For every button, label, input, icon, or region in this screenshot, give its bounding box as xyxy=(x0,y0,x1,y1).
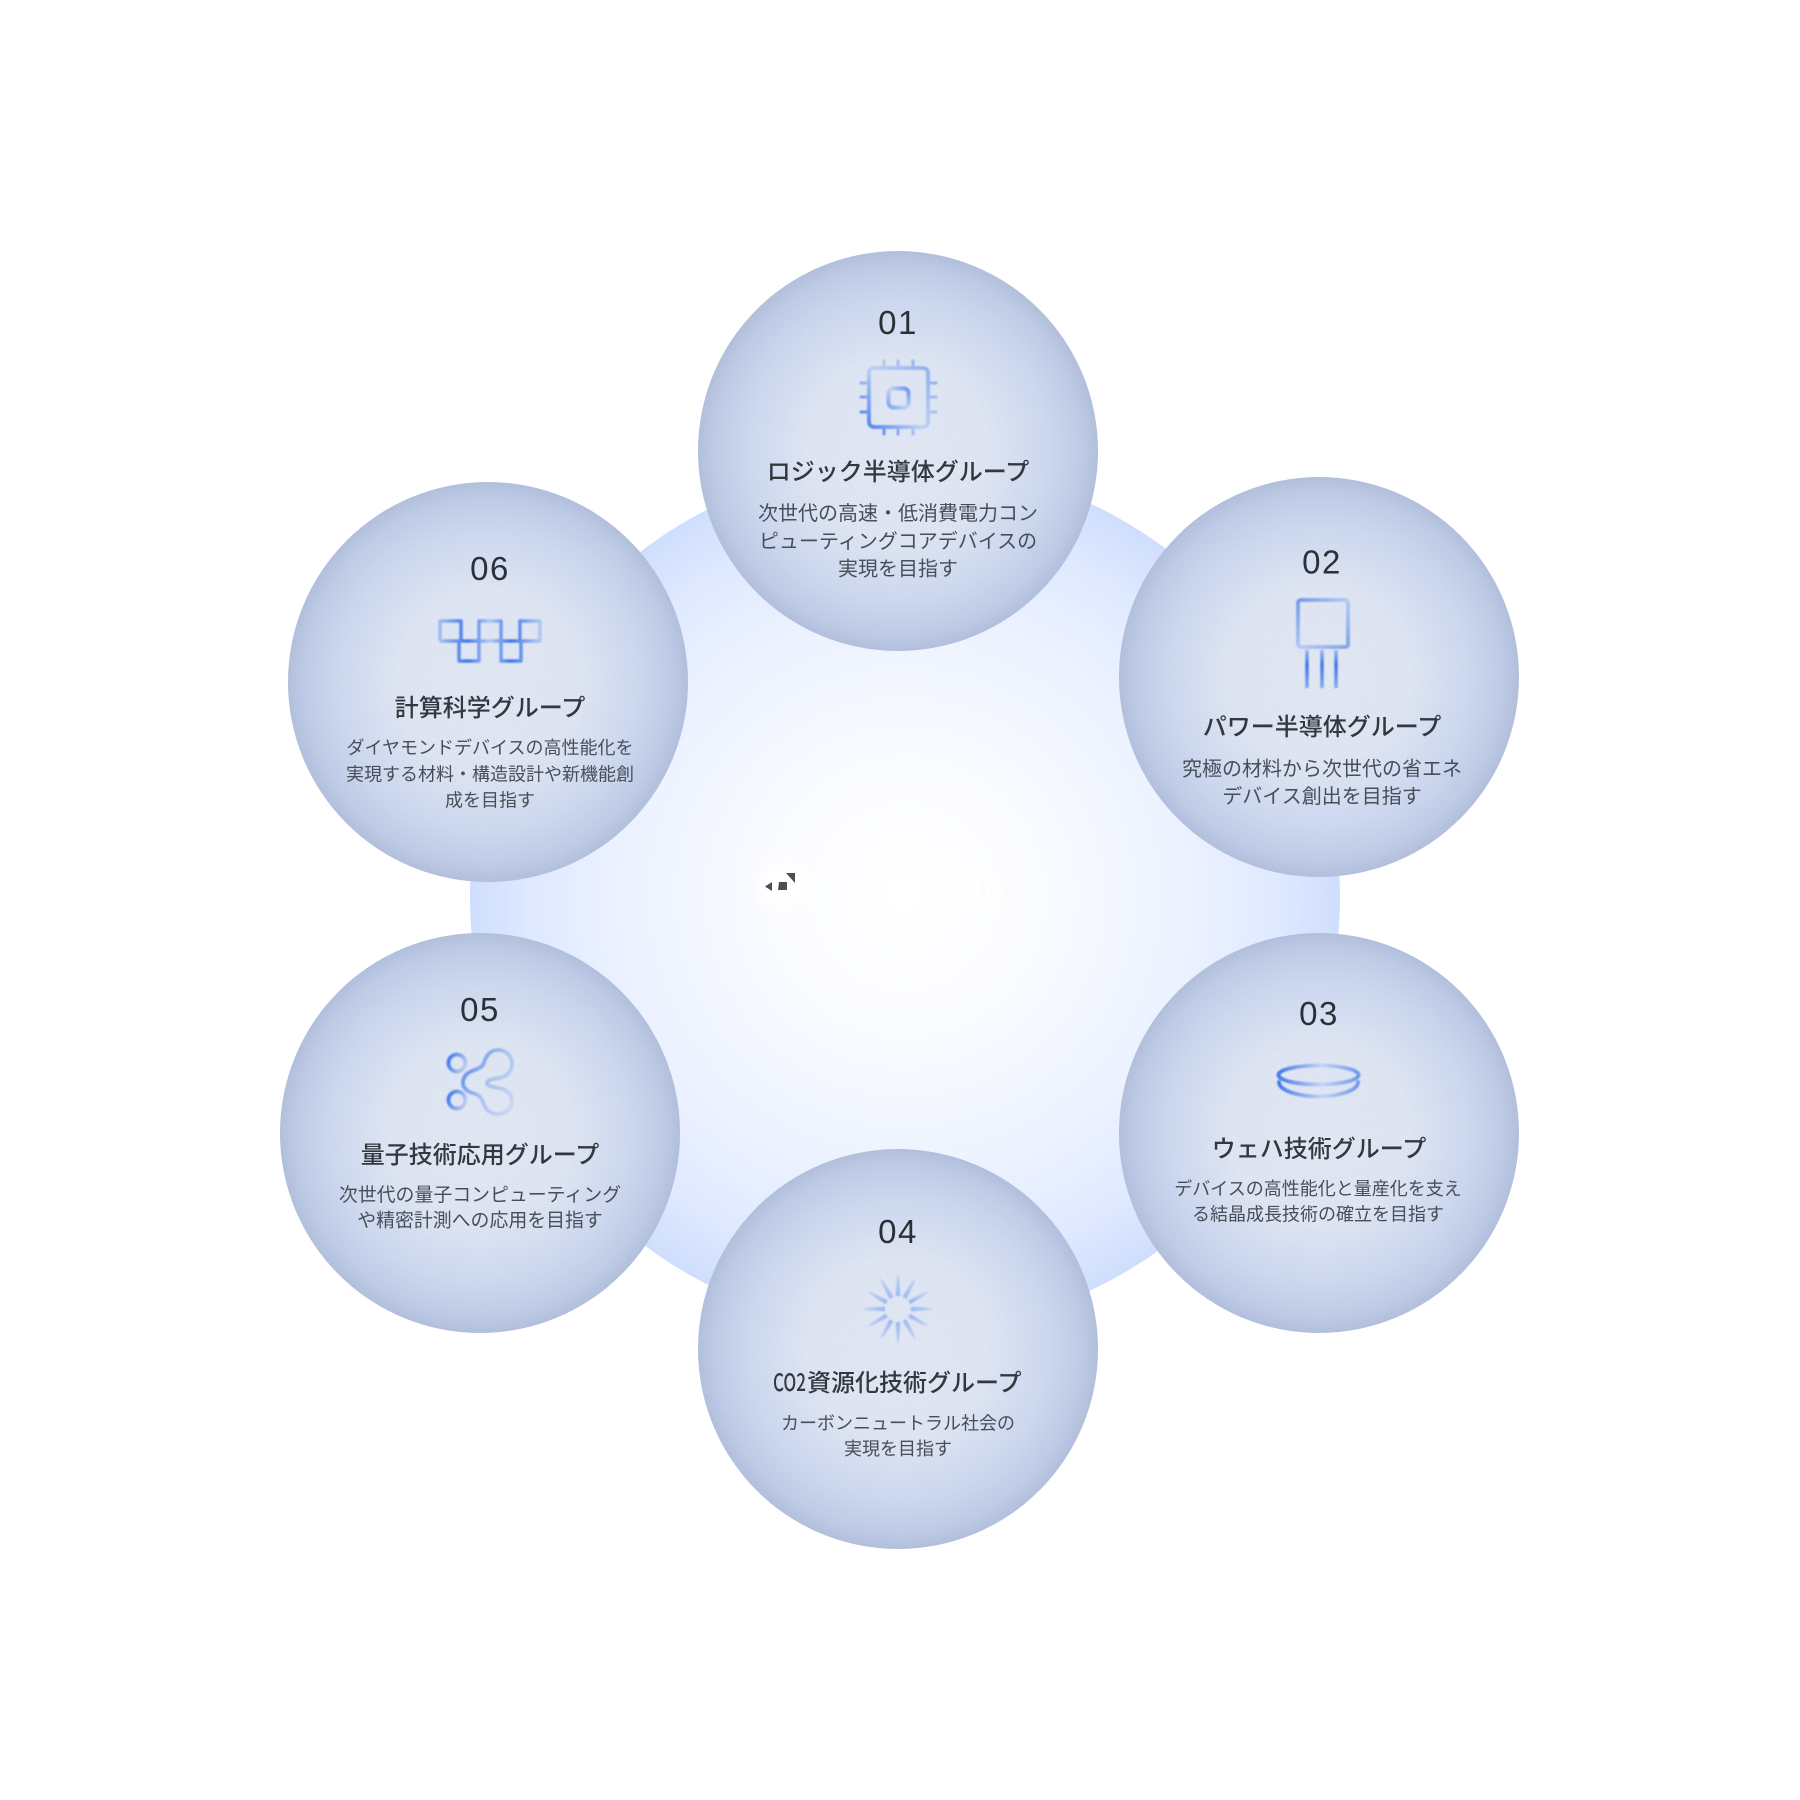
number 03: 03 xyxy=(1299,995,1339,1032)
panel 05: quantum technology xyxy=(280,933,680,1333)
icon: quantum network xyxy=(448,1050,512,1114)
number 05: 05 xyxy=(460,991,500,1028)
description xyxy=(346,734,634,812)
description: デバイス創出を目指す xyxy=(1222,780,1422,809)
icon: power transistor xyxy=(1298,600,1348,688)
heading: パワー半導体グループ xyxy=(1203,707,1441,742)
number 01: 01 xyxy=(878,304,918,341)
central gradient circle xyxy=(470,462,1340,1332)
description: 成を目指す xyxy=(445,786,535,812)
number 04: 04 xyxy=(878,1213,918,1250)
heading: 計算科学グループ xyxy=(395,688,585,723)
description: ダイヤモンドデバイスの高性能化を xyxy=(347,734,633,760)
heading: 資源化技術グループ xyxy=(807,1363,1022,1398)
description: る結晶成長技術の確立を目指す xyxy=(1192,1200,1444,1226)
description: 実現を目指す xyxy=(844,1435,952,1461)
panel 03: wafer technology xyxy=(1119,933,1519,1333)
description xyxy=(339,1180,621,1232)
description xyxy=(758,497,1038,582)
number 06: 06 xyxy=(470,550,510,587)
heading: 量子技術応用グループ xyxy=(361,1135,599,1170)
icon: chip xyxy=(861,361,936,434)
description: 次世代の量子コンピューティング xyxy=(339,1180,621,1207)
description xyxy=(781,1410,1015,1461)
center logo xyxy=(756,863,1007,907)
panel 06: computational science xyxy=(288,482,688,882)
panel 02: power semiconductor xyxy=(1119,477,1519,877)
description: 実現する材料・構造設計や新機能創 xyxy=(346,760,634,786)
panel 04: CO2 utilisation xyxy=(698,1149,1098,1549)
panel 01: logic semiconductor xyxy=(698,251,1098,651)
heading: ウェハ技術グループ xyxy=(1212,1129,1426,1164)
number 02: 02 xyxy=(1302,544,1342,580)
description: デバイスの高性能化と量産化を支え xyxy=(1174,1175,1462,1201)
description: や精密計測への応用を目指す xyxy=(357,1206,603,1232)
heading: CO2 xyxy=(773,1363,806,1398)
description: 究極の材料から次世代の省エネ xyxy=(1182,752,1462,782)
icon: sunburst xyxy=(862,1273,934,1345)
description: 次世代の高速・低消費電力コン xyxy=(758,497,1038,526)
description xyxy=(1174,1175,1462,1226)
heading: ロジック半導体グループ xyxy=(767,452,1029,487)
description: 実現を目指す xyxy=(838,552,958,582)
center logo: ARCDia xyxy=(859,866,1007,907)
icon: wafer rings xyxy=(1278,1066,1358,1096)
icon: lattice xyxy=(440,621,540,661)
description: ピューティングコアデバイスの xyxy=(759,525,1037,554)
description xyxy=(1182,752,1462,809)
description: カーボンニュートラル社会の xyxy=(781,1410,1015,1436)
